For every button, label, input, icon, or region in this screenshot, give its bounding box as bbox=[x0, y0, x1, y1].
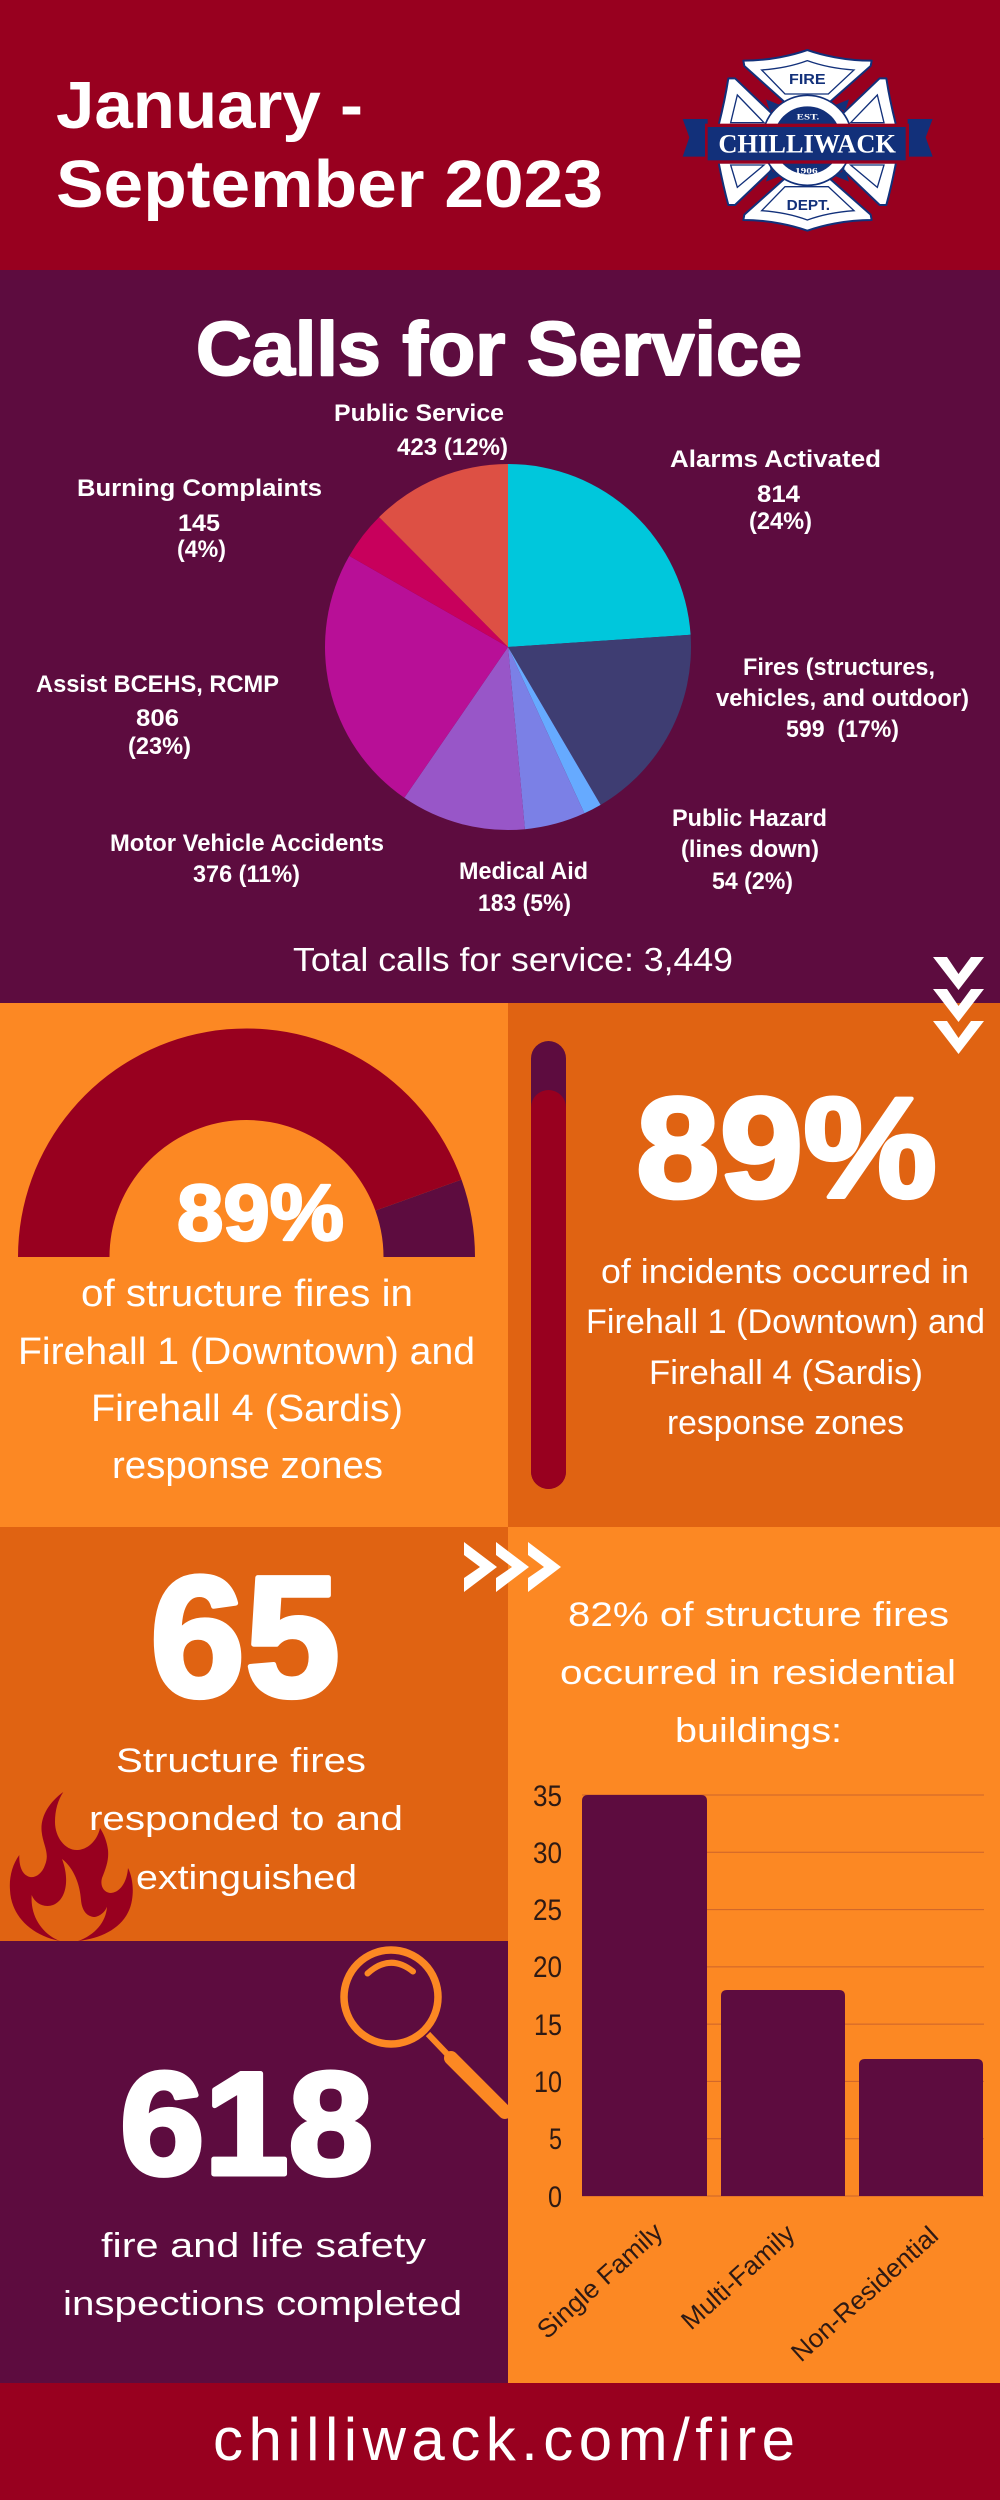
text: structure fires description bbox=[18, 1273, 475, 1487]
panel: inspections bbox=[0, 1941, 508, 2383]
heading: calls for service: Calls for Service bbox=[196, 307, 802, 392]
text: inspections completed: inspections completed bbox=[63, 2285, 462, 2323]
gauge chart bbox=[18, 1028, 475, 1257]
label: assist BCEHS, RCMP: Assist BCEHS, RCMP bbox=[36, 671, 279, 698]
panel: residential buildings bbox=[508, 1527, 1000, 2383]
text: structure fires description: Firehall 1 (Downtown) and bbox=[18, 1331, 475, 1373]
label: fires: vehicles, and outdoor) bbox=[716, 685, 969, 712]
label: assist BCEHS, RCMP bbox=[36, 671, 279, 760]
heading: residential: 82% of structure fires bbox=[568, 1596, 949, 1634]
label: burning complaints bbox=[77, 475, 322, 563]
y axis labels: 0 bbox=[548, 2181, 562, 2214]
icon: chevrons down bbox=[933, 957, 984, 1054]
y axis labels: 5 bbox=[549, 2123, 562, 2156]
bar chart bbox=[531, 1780, 984, 2367]
y axis labels: 15 bbox=[534, 2009, 562, 2042]
label: motor vehicle accidents: Motor Vehicle Accidents bbox=[110, 830, 384, 857]
label: fires: Fires (structures, bbox=[743, 654, 935, 681]
label: alarms activated: Alarms Activated bbox=[670, 446, 881, 473]
icon: Chilliwack fire department logo: 1906 bbox=[795, 167, 818, 176]
y axis labels bbox=[533, 1780, 562, 2214]
label: alarms activated: (24%) bbox=[749, 508, 812, 535]
label: public service bbox=[334, 400, 508, 461]
label: burning complaints: Burning Complaints bbox=[77, 475, 322, 502]
panel: structure fires by firehall bbox=[0, 1003, 508, 1527]
label: medical aid: 183 (5%) bbox=[478, 890, 571, 917]
icon: Chilliwack fire department logo: FIRE bbox=[789, 72, 826, 88]
y axis labels: 20 bbox=[533, 1951, 562, 1984]
heading: residential: occurred in residential bbox=[560, 1654, 956, 1692]
text: inspections completed bbox=[63, 2227, 462, 2323]
heading: residential bbox=[560, 1596, 956, 1750]
label: fires: 599 (17%) bbox=[786, 716, 899, 743]
label: public hazard: 54 (2%) bbox=[712, 868, 793, 895]
panel: incidents by firehall bbox=[508, 1003, 1000, 1527]
text: total calls: Total calls for service: 3,449 bbox=[293, 941, 733, 978]
y axis labels: 30 bbox=[533, 1837, 562, 1870]
label: public service: Public Service bbox=[334, 400, 504, 427]
label: motor vehicle accidents: 376 (11%) bbox=[193, 861, 300, 888]
text: structure fires responded bbox=[89, 1742, 403, 1897]
label: fires bbox=[716, 654, 969, 743]
panel: footer bbox=[0, 2383, 1000, 2500]
label: assist BCEHS, RCMP: 806 bbox=[136, 705, 179, 732]
pie chart bbox=[325, 464, 691, 830]
y axis labels: 35 bbox=[533, 1780, 562, 1813]
text: structure fires responded: responded to and bbox=[89, 1800, 403, 1838]
text: structure fires responded: extinguished bbox=[136, 1859, 357, 1897]
text: structure fires description: response zones bbox=[112, 1445, 383, 1487]
title: September 2023 bbox=[56, 147, 603, 222]
panel: header bbox=[0, 0, 1000, 270]
label: burning complaints: 145 bbox=[178, 510, 220, 537]
text: incidents description: Firehall 1 (Downtown) and bbox=[586, 1303, 985, 1341]
icon: Chilliwack fire department logo bbox=[683, 50, 933, 231]
icon: chevrons right bbox=[464, 1542, 561, 1592]
x axis labels bbox=[531, 2216, 944, 2367]
label: medical aid bbox=[459, 858, 588, 917]
label: public hazard bbox=[672, 805, 827, 895]
icon: magnifying glass bbox=[344, 1950, 505, 2112]
icon: Chilliwack fire department logo: CHILLIWACK bbox=[718, 128, 896, 158]
y axis labels: 10 bbox=[534, 2066, 562, 2099]
icon: Chilliwack fire department logo: EST. bbox=[797, 112, 819, 121]
label: alarms activated bbox=[670, 446, 881, 535]
text: incidents description: Firehall 4 (Sardis) bbox=[649, 1354, 923, 1392]
stat: 618: 618 bbox=[120, 2042, 373, 2205]
x axis labels: Multi-Family bbox=[675, 2218, 801, 2335]
icon: Chilliwack fire department logo: DEPT. bbox=[787, 198, 830, 214]
heading: residential: buildings: bbox=[675, 1712, 842, 1750]
panel: calls for service bbox=[0, 270, 1000, 1003]
stat: 89 percent: 89% bbox=[177, 1168, 344, 1257]
icon: flame bbox=[10, 1792, 133, 1941]
stat: 65: 65 bbox=[150, 1541, 340, 1733]
text: structure fires responded: Structure fires bbox=[116, 1742, 366, 1780]
bars bbox=[582, 1795, 983, 2196]
label: motor vehicle accidents bbox=[110, 830, 384, 888]
text: incidents description: response zones bbox=[667, 1404, 904, 1442]
stat: 89 percent: 89% bbox=[636, 1069, 937, 1228]
label: public hazard: (lines down) bbox=[681, 836, 819, 863]
panel: structure fires count bbox=[0, 1527, 508, 1941]
text: incidents description bbox=[586, 1253, 985, 1442]
text: incidents description: of incidents occurred in bbox=[601, 1253, 969, 1291]
y axis labels: 25 bbox=[533, 1894, 562, 1927]
title bbox=[56, 68, 603, 222]
x axis labels: Non-Residential bbox=[785, 2220, 944, 2367]
x axis labels: Single Family bbox=[531, 2216, 668, 2344]
label: assist BCEHS, RCMP: (23%) bbox=[128, 733, 191, 760]
label: public hazard: Public Hazard bbox=[672, 805, 827, 832]
text: structure fires description: of structure fires in bbox=[81, 1273, 413, 1315]
text: website: chilliwack.com/fire bbox=[213, 2406, 795, 2473]
title: January - bbox=[56, 68, 363, 143]
label: public service: 423 (12%) bbox=[397, 434, 508, 461]
label: alarms activated: 814 bbox=[757, 481, 801, 508]
label: medical aid: Medical Aid bbox=[459, 858, 588, 885]
text: inspections completed: fire and life safety bbox=[101, 2227, 426, 2265]
progress bar bbox=[531, 1041, 566, 1489]
label: burning complaints: (4%) bbox=[177, 536, 226, 563]
text: structure fires description: Firehall 4 (Sardis) bbox=[91, 1388, 403, 1430]
